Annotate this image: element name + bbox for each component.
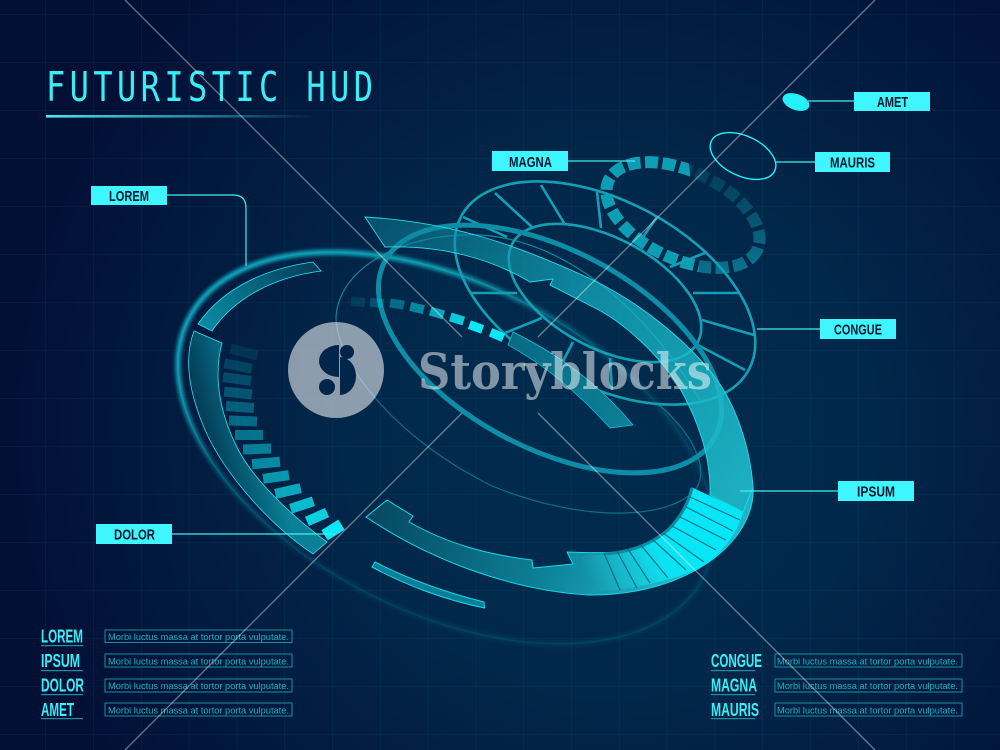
watermark bbox=[125, 0, 875, 750]
watermark text: Storyblocks bbox=[418, 342, 712, 401]
label: amet bbox=[854, 92, 930, 111]
top-left arc panel bbox=[198, 262, 321, 331]
legend row: magna: MAGNA bbox=[711, 676, 757, 696]
label: mauris: MAURIS bbox=[830, 154, 875, 172]
thin ring bbox=[336, 235, 701, 513]
dashed dial top right bbox=[600, 156, 766, 274]
legend row: congue: CONGUE bbox=[711, 651, 762, 671]
label: lorem bbox=[91, 186, 167, 205]
icon: filled ellipse bbox=[780, 90, 812, 114]
hatched section bbox=[582, 488, 743, 590]
legend row: lorem: Morbi luctus massa at tortor porta vulputate. bbox=[108, 632, 289, 643]
legend row: dolor: DOLOR bbox=[41, 676, 84, 696]
legend row: lorem bbox=[41, 626, 292, 646]
wheel bbox=[418, 135, 792, 451]
label: congue bbox=[820, 319, 896, 339]
label: magna bbox=[492, 151, 568, 171]
connector lines bbox=[167, 101, 854, 534]
label: lorem: LOREM bbox=[109, 188, 149, 205]
label: magna: MAGNA bbox=[509, 154, 552, 171]
legend row: mauris: MAURIS bbox=[711, 700, 759, 720]
center dashes bbox=[351, 297, 505, 342]
watermark logo bbox=[288, 322, 384, 418]
legend row: amet: AMET bbox=[41, 700, 74, 720]
center arc panel bbox=[508, 332, 633, 428]
title: FUTURISTIC HUD bbox=[46, 63, 373, 111]
legend row: lorem: LOREM bbox=[41, 626, 83, 646]
main glass band bbox=[365, 217, 753, 512]
left long panel bbox=[189, 331, 327, 554]
legend row: mauris: Morbi luctus massa at tortor porta vulputate. bbox=[777, 706, 958, 716]
legend row: congue bbox=[711, 651, 962, 671]
label: ipsum bbox=[838, 481, 914, 501]
outer glow ring bbox=[115, 172, 777, 724]
medium ring bbox=[338, 174, 762, 524]
legend row: congue: Morbi luctus massa at tortor porta vulputate. bbox=[777, 656, 958, 668]
legend row: amet bbox=[41, 700, 292, 720]
HUD diagram bbox=[172, 156, 766, 646]
watermark diagonals bbox=[125, 0, 875, 750]
icon: outline ellipse bbox=[703, 123, 783, 189]
legend row: mauris bbox=[711, 700, 962, 720]
label: congue: CONGUE bbox=[834, 322, 882, 338]
label: ipsum: IPSUM bbox=[857, 484, 895, 500]
legend right bbox=[711, 651, 962, 720]
legend row: ipsum: Morbi luctus massa at tortor porta vulputate. bbox=[108, 656, 289, 668]
legend row: dolor: Morbi luctus massa at tortor porta vulputate. bbox=[108, 681, 289, 692]
legend row: ipsum: IPSUM bbox=[41, 651, 80, 671]
legend left bbox=[41, 626, 292, 720]
legend row: magna bbox=[711, 676, 962, 696]
legend row: magna: Morbi luctus massa at tortor porta vulputate. bbox=[777, 681, 958, 692]
lower band bbox=[366, 487, 753, 595]
left stacked bars bbox=[222, 344, 345, 540]
label: amet: AMET bbox=[877, 94, 908, 111]
small lower arc bbox=[372, 562, 484, 608]
legend row: amet: Morbi luctus massa at tortor porta vulputate. bbox=[108, 706, 289, 716]
legend row: ipsum bbox=[41, 651, 292, 671]
label: dolor bbox=[96, 524, 172, 544]
label: dolor: DOLOR bbox=[114, 526, 155, 544]
label: mauris bbox=[815, 152, 890, 172]
legend row: dolor bbox=[41, 676, 292, 696]
